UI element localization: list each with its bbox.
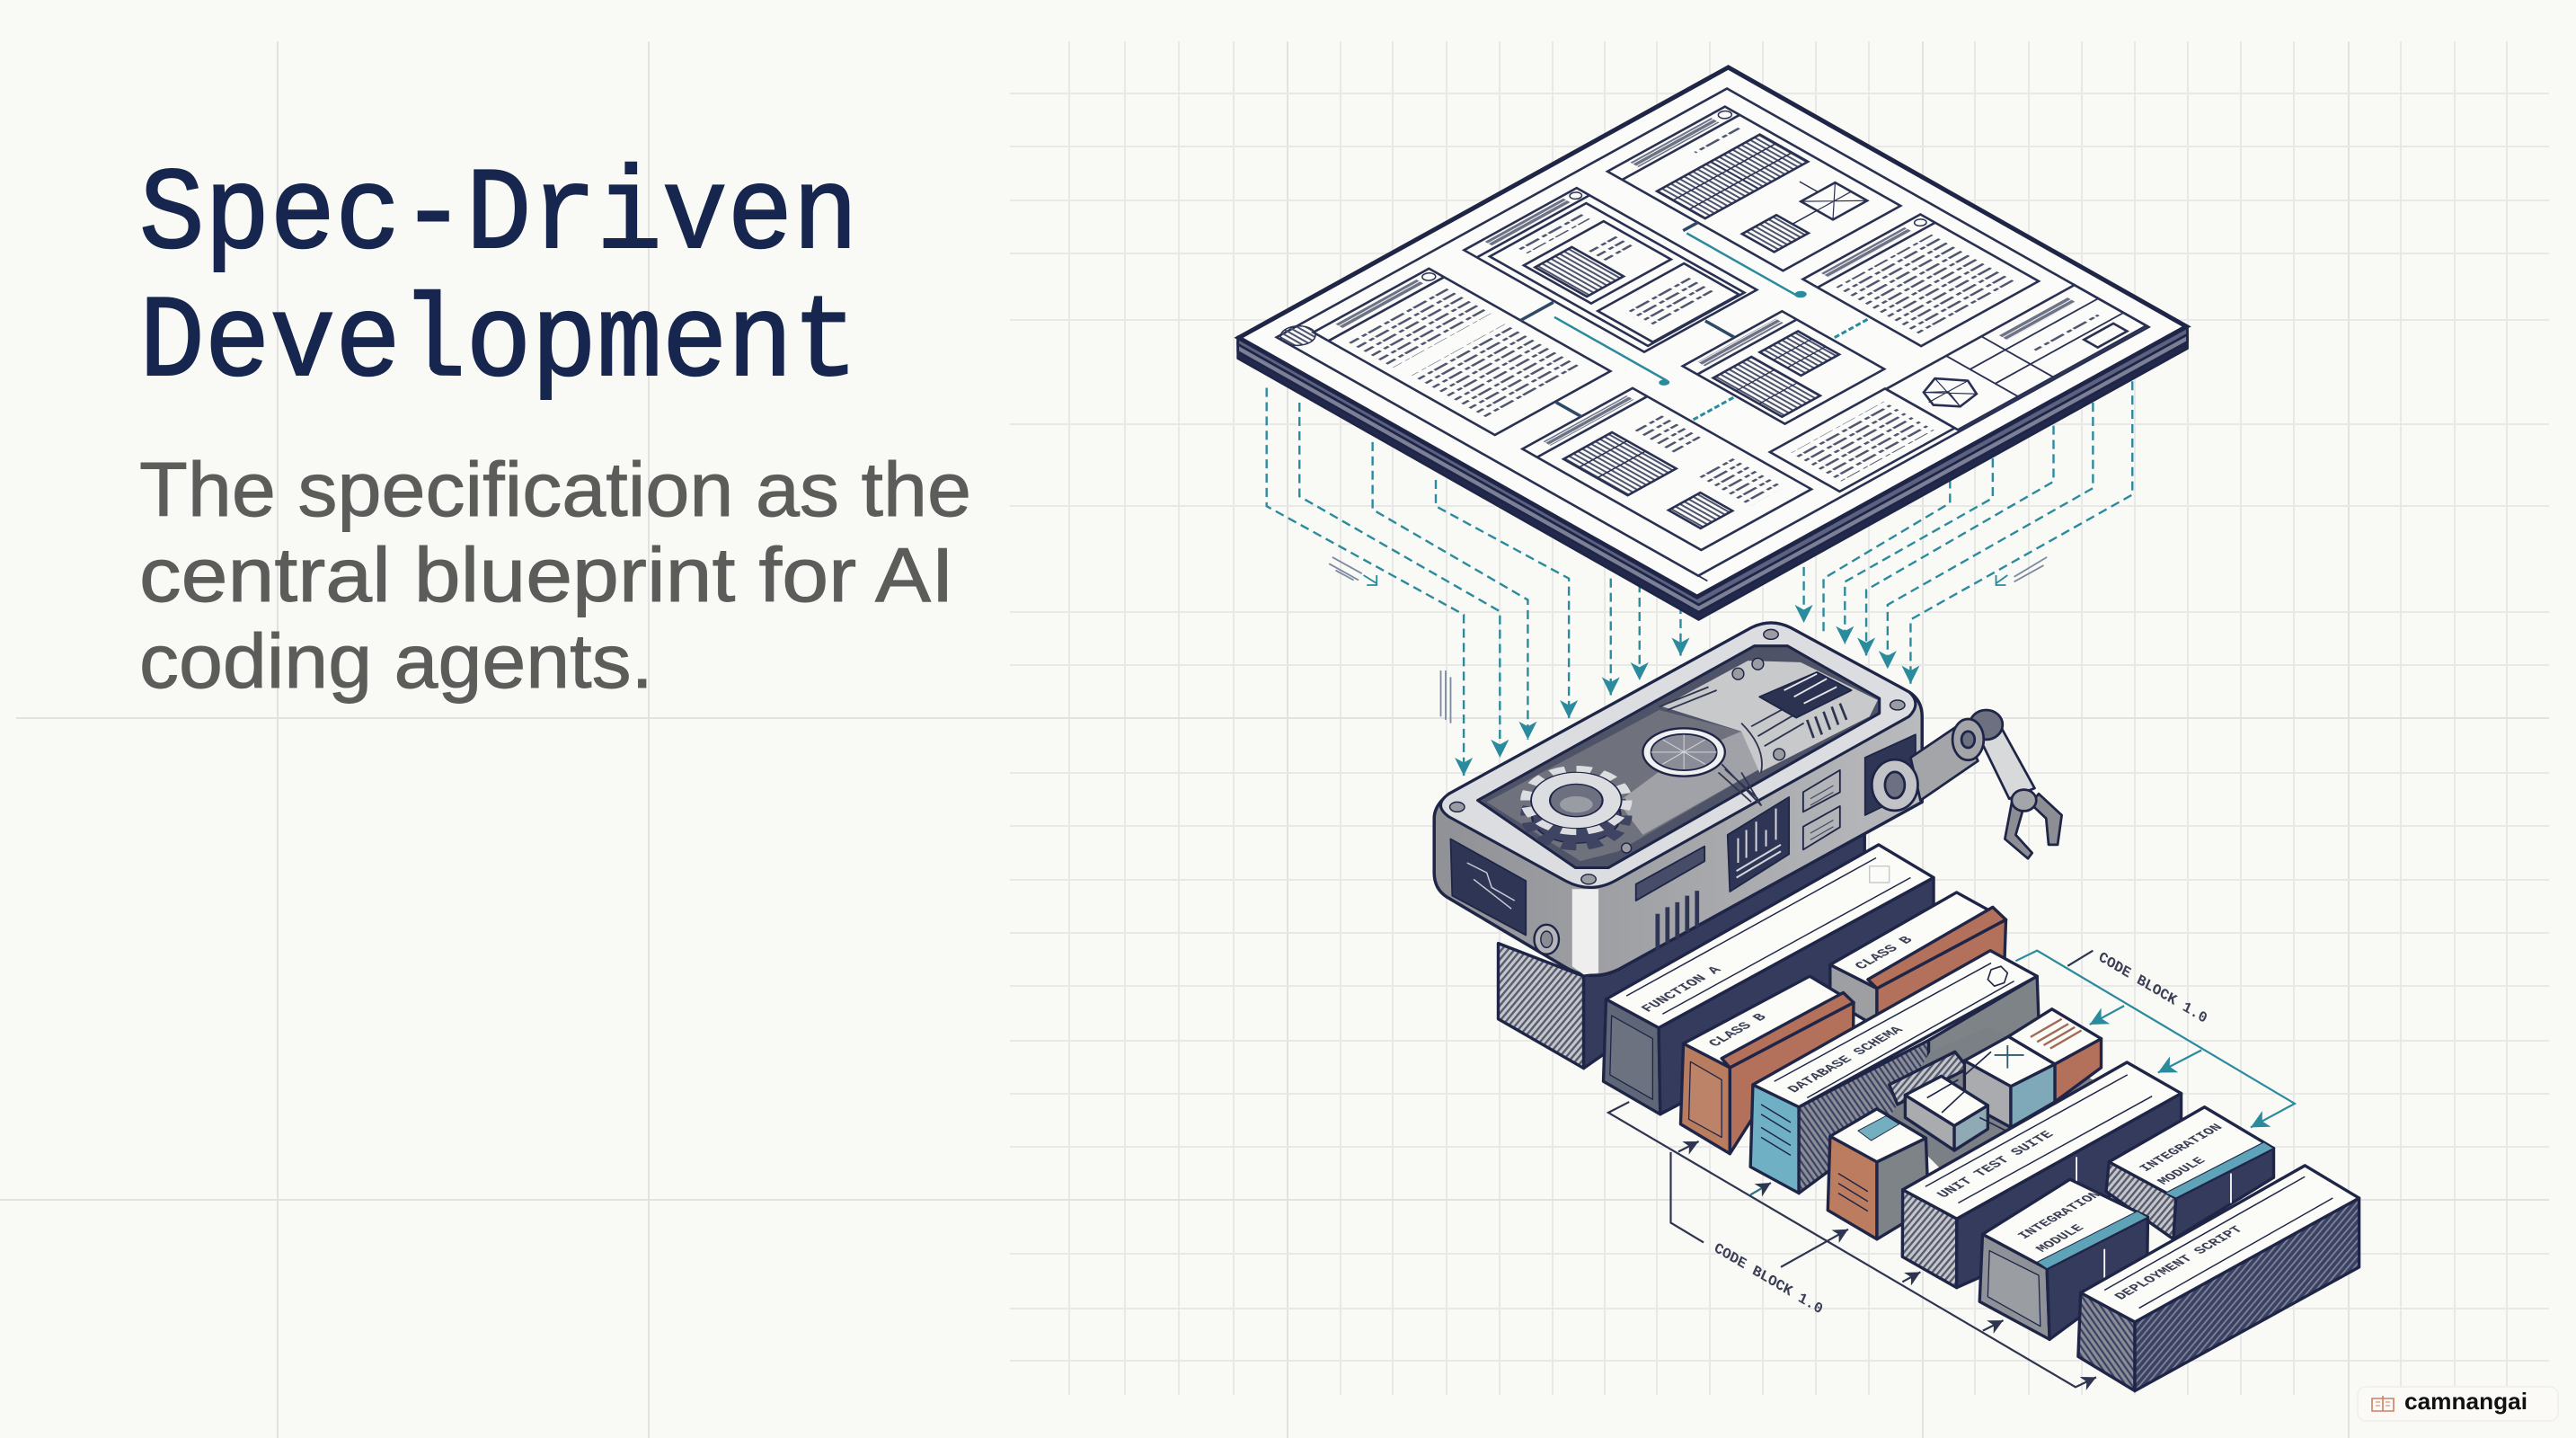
code block: unit test suite (1902, 1062, 2182, 1288)
code block: central modules cluster (1828, 1009, 2102, 1239)
panel: right lower notes (1770, 388, 1955, 492)
code block: class b rear (1830, 892, 2005, 1039)
code block: integration module rear (2106, 1107, 2274, 1239)
upper teal connector (2015, 951, 2295, 1127)
brand name: camnangai (2404, 1388, 2527, 1415)
cube: rust striped (2008, 1009, 2102, 1102)
vent panel (1636, 847, 1704, 901)
robotic arm (1872, 710, 2062, 858)
machine top rim (1441, 623, 1916, 887)
code block: class b front (1680, 976, 1854, 1154)
arm mount (1865, 734, 1916, 815)
code block: function a: FUNCTION A (1638, 963, 1726, 1015)
panel: left text section (1314, 269, 1610, 435)
code block: integration module front: MODULE (2033, 1223, 2088, 1255)
lens (1642, 728, 1725, 777)
code block: database schema (1750, 951, 2039, 1194)
code block: class b rear: CLASS B (1851, 934, 1917, 972)
cube: teal side (1964, 1036, 2055, 1127)
knob (1535, 925, 1559, 954)
cube: rust front with label (1828, 1109, 1928, 1239)
code block: integration module rear: INTEGRATION (2137, 1123, 2226, 1174)
cube: center (1905, 1076, 1987, 1150)
lower connector with arrows and callout (1608, 1102, 2096, 1387)
subtitle (139, 448, 971, 705)
status chip (1759, 672, 1852, 718)
small annotation marks (1329, 557, 2047, 723)
dashed flow arrows from specification to agent (1267, 381, 2132, 776)
code block: database schema: DATABASE SCHEMA (1784, 1024, 1908, 1096)
gear (1527, 770, 1625, 847)
code block: function a (1604, 845, 1934, 1114)
code block: integration module front: INTEGRATION (2015, 1190, 2105, 1241)
title: Development (139, 279, 858, 411)
panel: top requirements table (1607, 107, 1900, 271)
blueprint sheet with panels (1239, 67, 2187, 597)
subtitle: The specification as the (139, 448, 971, 533)
code block: integration module front (1979, 1179, 2147, 1339)
specification blueprint document (1238, 67, 2188, 619)
front screen (1450, 839, 1526, 935)
subtitle: central blueprint for AI (139, 533, 954, 618)
chart screen (1728, 797, 1789, 892)
machine body (1434, 623, 1922, 975)
title (139, 151, 858, 411)
panel: second section with nested boxes (1464, 188, 1757, 352)
panel: right text section (1803, 214, 2039, 346)
label: code block lower: CODE BLOCK 1.0 (1712, 1239, 1826, 1318)
code block: integration module rear: MODULE (2156, 1156, 2209, 1187)
title: Spec-Driven (139, 151, 858, 283)
ai agent machine (1434, 623, 2062, 975)
screws (1450, 629, 1905, 884)
panel connector arrows (1465, 222, 1873, 449)
paper stack layers (1238, 327, 2188, 619)
code block: unit test suite: UNIT TEST SUITE (1934, 1129, 2058, 1201)
icon: open book (2372, 1396, 2394, 1411)
label: code block upper: CODE BLOCK 1.0 (2096, 948, 2209, 1027)
code block: deployment script (2078, 1166, 2359, 1391)
isometric illustration (1238, 67, 2359, 1391)
recessed top panel (1478, 646, 1880, 868)
pedestal under agent (1499, 827, 1864, 1069)
watermark badge (2358, 1387, 2558, 1421)
corner emblem (1273, 322, 1323, 350)
code block: class b front: CLASS B (1705, 1011, 1771, 1049)
code block: deployment script: DEPLOYMENT SCRIPT (2111, 1224, 2247, 1302)
subtitle: coding agents. (139, 619, 653, 705)
panel: bottom schema section (1522, 388, 1811, 550)
panel: title block with icon (1886, 285, 2147, 430)
info plates (1803, 770, 1840, 812)
panel: center data tables (1683, 311, 1884, 424)
